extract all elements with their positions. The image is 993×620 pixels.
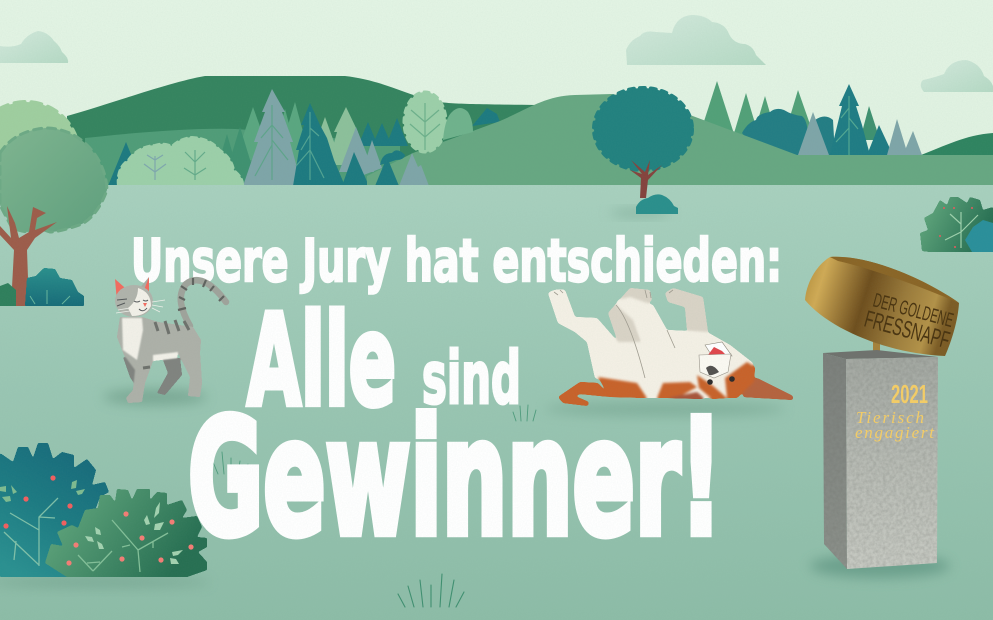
forest centre bbox=[118, 92, 473, 186]
tree: teal left bbox=[108, 142, 144, 186]
tree: grey small bbox=[399, 153, 429, 186]
tree: teal spruce bbox=[293, 103, 345, 186]
tail stripes bbox=[178, 278, 224, 310]
crown bbox=[0, 128, 107, 232]
year: 2021 bbox=[891, 379, 928, 409]
branches bbox=[4, 498, 58, 566]
ground bbox=[0, 185, 993, 620]
tree: left light back tree bbox=[0, 102, 79, 208]
hill: right large hill bbox=[367, 94, 993, 186]
grass: below sind bbox=[513, 405, 536, 421]
trees: darker green bbox=[212, 127, 258, 186]
head bbox=[115, 285, 153, 317]
cat body shapes bbox=[117, 317, 202, 403]
cloud: top left bbox=[0, 31, 68, 63]
trees: green cones bbox=[698, 81, 812, 140]
script line: Tierisch: Tierisch bbox=[856, 408, 924, 427]
berries bbox=[66, 511, 194, 566]
tail bbox=[181, 280, 226, 326]
bush: small green bbox=[443, 108, 473, 140]
trunk and branches bbox=[0, 206, 57, 306]
tree: teal blob behind spruce bbox=[815, 116, 835, 155]
tree: left front tree bbox=[0, 128, 107, 306]
nose bbox=[143, 303, 147, 307]
hill: dark back hill bbox=[67, 76, 537, 186]
crown bbox=[594, 88, 692, 170]
bush: left base teal and green bbox=[0, 268, 84, 306]
forest left bbox=[108, 89, 500, 186]
tree: teal front bbox=[342, 152, 369, 186]
tree: centre teal tree bbox=[594, 88, 692, 198]
shadow: trophy bbox=[810, 554, 950, 578]
shadow: dog bbox=[545, 402, 785, 416]
trunk bbox=[630, 160, 662, 198]
tree: green small bbox=[860, 106, 880, 140]
concrete block top bbox=[823, 350, 938, 359]
illustration: cat bbox=[115, 277, 226, 403]
tree: dark teal small bbox=[375, 150, 405, 186]
title text bbox=[131, 226, 782, 571]
leaves bbox=[85, 502, 183, 564]
heading: Alle: Alle bbox=[247, 287, 396, 434]
berries bbox=[3, 475, 73, 529]
trees: grey right bbox=[798, 112, 922, 155]
face lines bbox=[117, 299, 148, 311]
tree: teal cone bbox=[867, 125, 893, 155]
concrete block side bbox=[823, 353, 847, 569]
far hills left bbox=[67, 76, 993, 186]
eyes bbox=[707, 379, 713, 385]
shadow: cat bbox=[103, 389, 207, 405]
trees: grey bbox=[339, 127, 382, 176]
script line: engagiert: engagiert bbox=[855, 423, 935, 442]
branches bbox=[78, 520, 168, 572]
shadow: centre bush bbox=[610, 210, 670, 216]
bush: bottom left teal bbox=[0, 443, 109, 577]
trees: small dark teal row bbox=[358, 108, 500, 146]
post bbox=[873, 342, 880, 355]
concrete block front bbox=[846, 357, 938, 569]
cloud: right bbox=[921, 60, 993, 92]
panel: sky background bbox=[0, 0, 993, 186]
gold ring inner rim bbox=[830, 257, 959, 303]
gold ring band bbox=[805, 257, 959, 356]
cloud: top centre bbox=[626, 15, 766, 65]
nose bbox=[706, 366, 719, 375]
grass: bottom centre bbox=[398, 574, 464, 607]
face marking bbox=[128, 288, 151, 316]
dog coloured shapes bbox=[548, 288, 793, 406]
tree: teal spruce right bbox=[830, 84, 870, 155]
bush: right green bbox=[920, 197, 993, 252]
trophy: Der Goldene Fressnapf bbox=[805, 257, 959, 569]
grass: inside G bbox=[213, 452, 248, 474]
paw and body lines bbox=[554, 290, 675, 378]
bush: centre teal bbox=[636, 194, 678, 214]
leaves bbox=[0, 480, 85, 502]
tree: pale round tree bbox=[404, 92, 446, 152]
trees: light green bbox=[312, 107, 364, 165]
ring lettering bbox=[861, 290, 956, 354]
bushes: pale green pair bbox=[118, 137, 243, 186]
ears bbox=[115, 279, 132, 302]
heading: sind: sind bbox=[422, 336, 521, 420]
illustration: dog bbox=[548, 288, 793, 406]
tree: blue-grey spruce bbox=[243, 89, 302, 186]
trees behind right hill bbox=[698, 81, 922, 155]
shadow: bushes bbox=[0, 577, 210, 587]
bush: teal blob bbox=[742, 109, 808, 155]
hill: far right bbox=[921, 133, 993, 160]
clouds bbox=[0, 15, 993, 92]
mouth bbox=[705, 342, 732, 356]
whiskers bbox=[116, 300, 165, 313]
hill: middle layer bbox=[85, 129, 400, 186]
grass tufts bbox=[398, 405, 536, 607]
stripes bbox=[143, 320, 189, 368]
trees: green back bbox=[235, 102, 312, 165]
muzzle bbox=[699, 354, 731, 378]
bush: bottom left green bbox=[45, 489, 207, 577]
bush: right teal bbox=[965, 220, 993, 252]
